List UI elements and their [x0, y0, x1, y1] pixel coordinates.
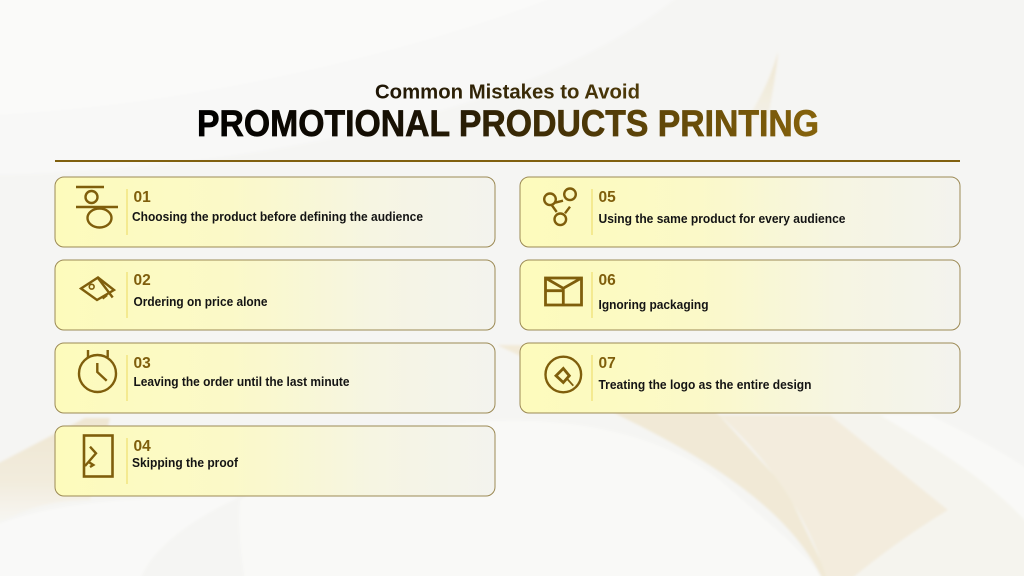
icon: package box [546, 278, 582, 305]
icon: clock [79, 350, 116, 392]
card 02 [55, 260, 495, 330]
card 06: 06 [598, 272, 616, 289]
card 01: 01 [134, 189, 151, 206]
card 07: Treating the logo as the entire design [598, 378, 812, 392]
icon: price tag [81, 278, 114, 300]
icon: connected circles [544, 188, 576, 225]
card 04 [55, 426, 495, 496]
card 01: Choosing the product before defining the audience [132, 210, 423, 224]
icon: stacked circles [76, 187, 118, 228]
subtitle: Common Mistakes to Avoid [375, 82, 640, 104]
card 07: 07 [598, 355, 616, 372]
card 02: Ordering on price alone [134, 295, 268, 309]
card 05: 05 [598, 189, 616, 206]
card 03: 03 [134, 355, 151, 372]
icon: proof document [84, 436, 112, 476]
card 05: Using the same product for every audience [598, 212, 846, 226]
card 03 [55, 343, 495, 413]
card 06: Ignoring packaging [598, 298, 708, 312]
card 03: Leaving the order until the last minute [134, 375, 350, 389]
title: PROMOTIONAL PRODUCTS PRINTING [197, 103, 819, 144]
card 07 [520, 343, 960, 413]
icon: logo badge [546, 357, 581, 392]
header divider [55, 160, 960, 162]
card 04: Skipping the proof [132, 456, 239, 470]
card 06 [520, 260, 960, 330]
card 04: 04 [134, 438, 151, 455]
card 02: 02 [134, 272, 151, 289]
card 01 [55, 177, 495, 247]
card 05 [520, 177, 960, 247]
